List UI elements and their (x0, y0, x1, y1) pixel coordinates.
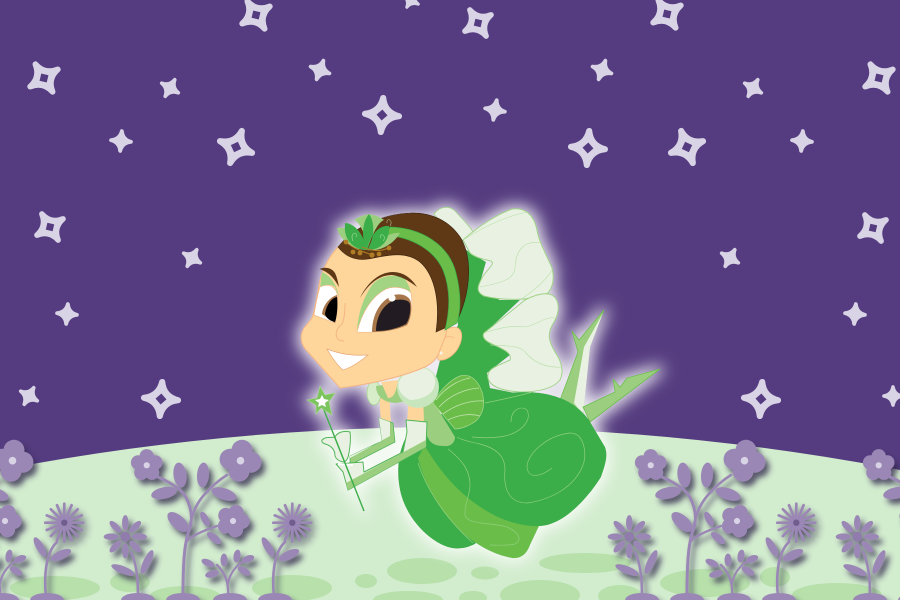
back green bodice mass (430, 240, 530, 420)
hand holding wand (322, 431, 350, 462)
flower cluster: center right (608, 437, 815, 600)
sash (418, 396, 455, 446)
tiara (337, 214, 400, 258)
dress swirls (418, 392, 585, 545)
nose (336, 303, 345, 341)
left eye (314, 268, 339, 323)
flower cluster: center left (104, 437, 311, 600)
shell sleeve (433, 375, 484, 429)
hair (338, 213, 469, 332)
tail spikes (560, 310, 660, 422)
wand (307, 386, 364, 511)
starry sky (16, 0, 900, 417)
smile (327, 349, 368, 370)
neck (381, 380, 398, 398)
bodice collar (376, 382, 415, 403)
far shoulder puff (367, 381, 381, 405)
light skirt layer (418, 445, 539, 558)
ear (437, 327, 462, 360)
near glove (336, 420, 427, 490)
green headband (385, 227, 460, 330)
flower cluster: far left (0, 437, 83, 600)
arms (379, 392, 424, 424)
fairy (301, 207, 660, 558)
far glove (350, 418, 395, 465)
near shoulder puff (397, 366, 439, 408)
lower wing (483, 294, 562, 392)
flower cluster: far right (836, 437, 900, 600)
green hill (0, 427, 900, 600)
face (301, 230, 450, 388)
right eye (357, 272, 417, 332)
small back wing (434, 207, 473, 245)
main skirt (423, 392, 606, 526)
upper wing (463, 209, 553, 299)
hill patches (10, 553, 882, 600)
back skirt layer (398, 420, 520, 548)
